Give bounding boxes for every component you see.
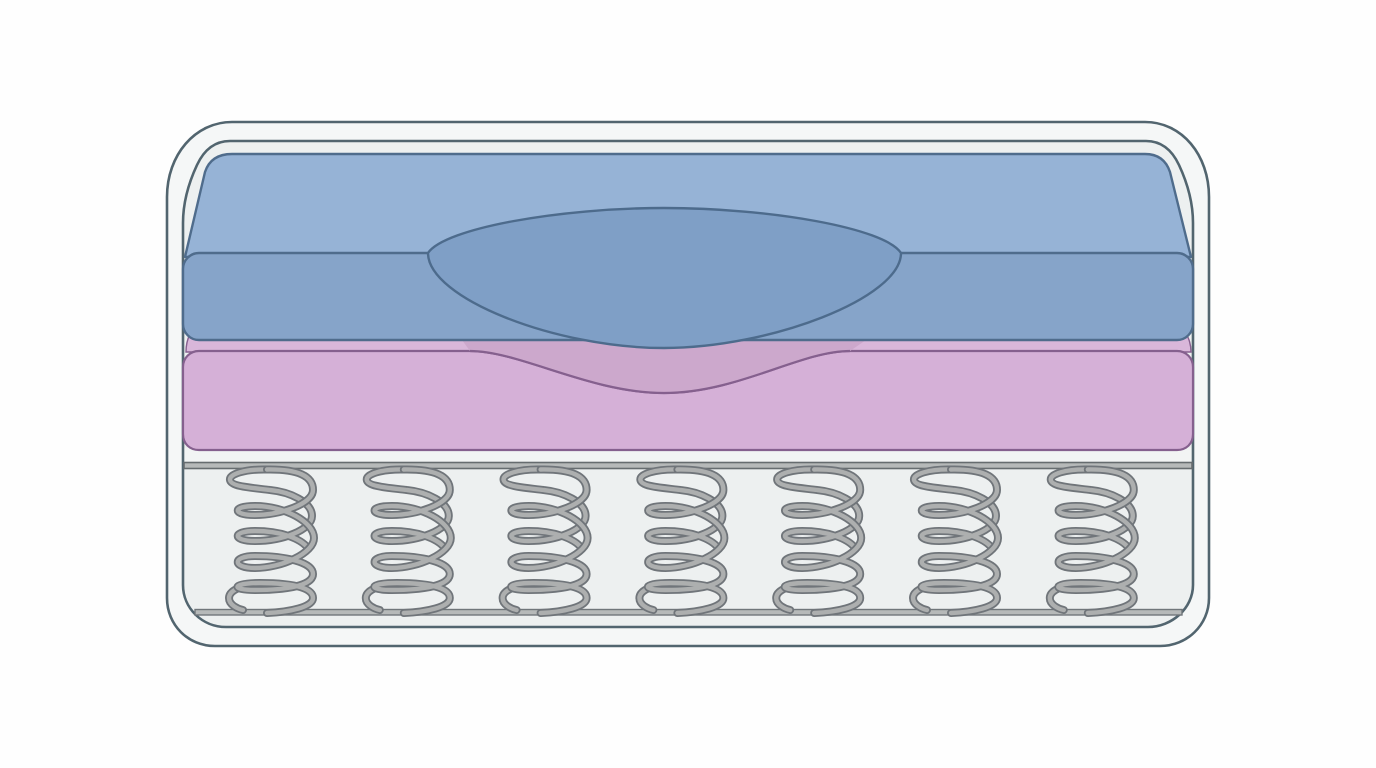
springs — [229, 469, 1135, 613]
spring 7 — [1050, 469, 1135, 613]
pink layer dip line — [470, 351, 850, 393]
spring 2 — [366, 469, 451, 613]
spring 6 — [913, 469, 998, 613]
pink layer: back edge — [186, 334, 1191, 352]
spring 1 — [229, 469, 314, 613]
pink support layer — [183, 351, 1193, 450]
body impression lens — [428, 208, 901, 348]
top comfort layer: upper surface — [185, 154, 1191, 257]
spring 5 — [776, 469, 861, 613]
spring 4 — [639, 469, 724, 613]
inner casing — [183, 141, 1193, 627]
spring 3 — [503, 469, 588, 613]
top comfort layer: front face — [183, 253, 1193, 340]
top spring plate — [184, 462, 1192, 468]
outer mattress casing — [167, 122, 1209, 646]
bottom spring plate — [195, 610, 1182, 615]
body impression shadow on pink layer — [462, 340, 866, 393]
gap above springs — [184, 448, 1192, 463]
